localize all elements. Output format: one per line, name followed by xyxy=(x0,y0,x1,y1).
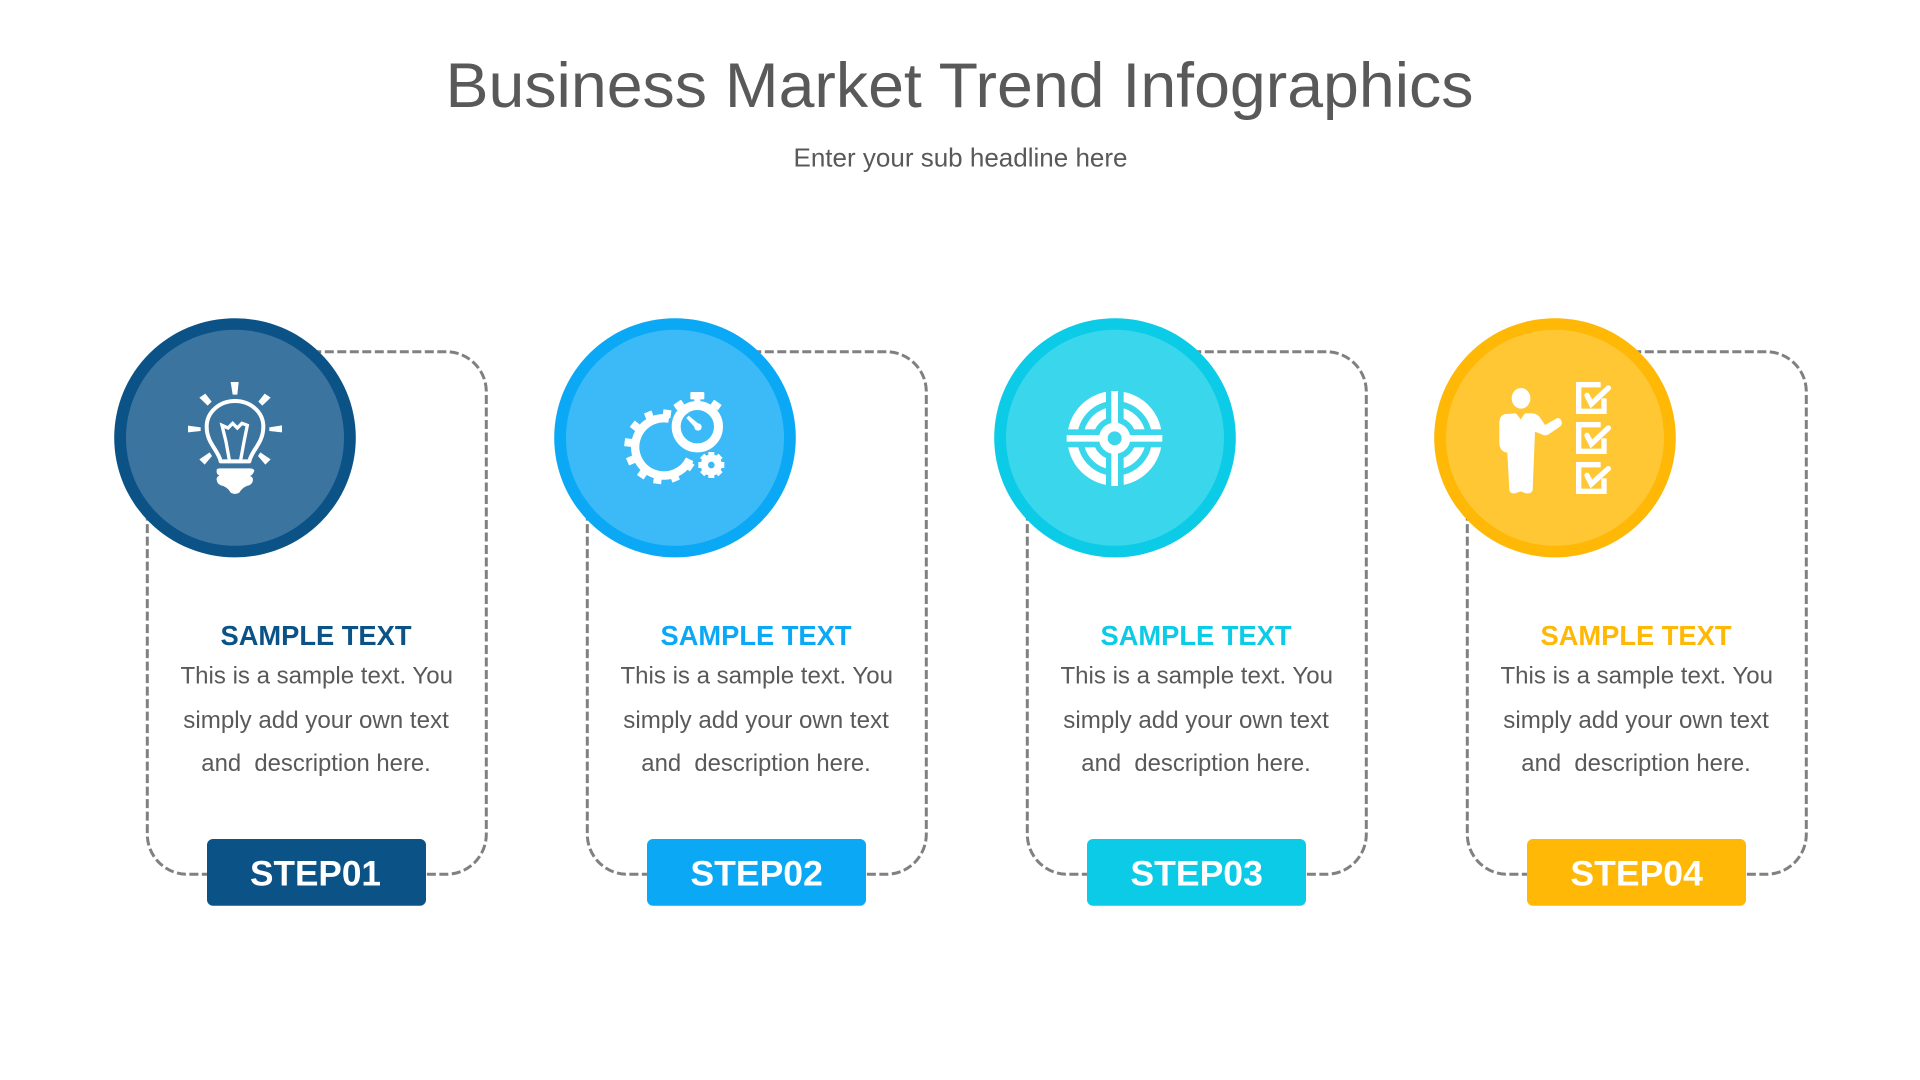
description text: and description here. xyxy=(1521,750,1751,777)
dashed card outline xyxy=(1467,352,1806,874)
icon: presenter with checklist xyxy=(1499,385,1608,493)
dashed card outline xyxy=(1027,352,1366,874)
step label xyxy=(1527,839,1746,906)
heading: SAMPLE TEXT xyxy=(1100,620,1292,651)
panel: step 04 xyxy=(1434,318,1806,906)
description text: This is a sample text. You xyxy=(180,663,453,690)
description text: simply add your own text xyxy=(623,707,889,734)
heading: SAMPLE TEXT xyxy=(220,620,412,651)
panel: step 02 xyxy=(554,318,926,906)
icon: light bulb xyxy=(188,382,282,494)
dashed card outline xyxy=(147,352,486,874)
description text xyxy=(620,663,893,777)
step label xyxy=(207,839,426,906)
description text: simply add your own text xyxy=(183,707,449,734)
description text: This is a sample text. You xyxy=(1500,663,1773,690)
circle badge xyxy=(554,318,796,557)
step label: STEP02 xyxy=(690,855,823,894)
description text: This is a sample text. You xyxy=(1060,663,1333,690)
step label: STEP03 xyxy=(1130,855,1263,894)
description text xyxy=(180,663,453,777)
description text: and description here. xyxy=(201,750,431,777)
dashed card outline xyxy=(587,352,926,874)
subtitle: Enter your sub headline here xyxy=(794,142,1128,172)
step label xyxy=(647,839,866,906)
step label: STEP01 xyxy=(250,855,381,894)
description text xyxy=(1060,663,1333,777)
description text: and description here. xyxy=(641,750,871,777)
description text: This is a sample text. You xyxy=(620,663,893,690)
panel: step 03 xyxy=(994,318,1366,906)
step label: STEP04 xyxy=(1570,855,1703,894)
heading: SAMPLE TEXT xyxy=(1540,620,1732,651)
step label xyxy=(1087,839,1306,906)
description text: simply add your own text xyxy=(1503,707,1769,734)
heading: SAMPLE TEXT xyxy=(660,620,852,651)
circle badge xyxy=(994,318,1236,557)
description text xyxy=(1500,663,1773,777)
circle badge xyxy=(114,318,356,557)
icon: target xyxy=(1063,387,1167,490)
description text: and description here. xyxy=(1081,750,1311,777)
icon: gears and stopwatch xyxy=(624,392,724,484)
description text: simply add your own text xyxy=(1063,707,1329,734)
panel: step 01 xyxy=(114,318,486,906)
title: Business Market Trend Infographics xyxy=(446,51,1474,121)
circle badge xyxy=(1434,318,1676,557)
